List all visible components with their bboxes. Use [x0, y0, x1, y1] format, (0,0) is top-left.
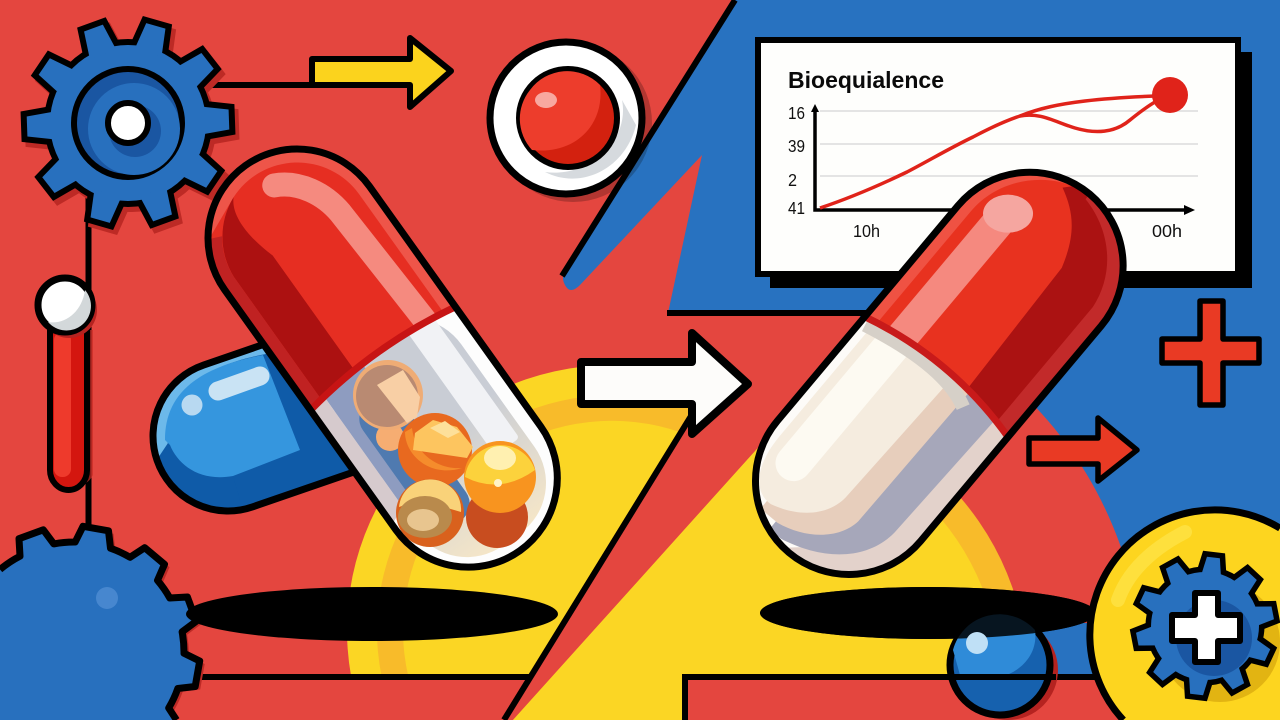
right capsule white body [759, 321, 1004, 571]
icon: blue ball [760, 587, 1096, 720]
left yellow sun [347, 368, 688, 674]
blue background wedge [563, 0, 1280, 677]
pellet: golden [464, 441, 536, 513]
blue capsule highlight bar [218, 376, 260, 391]
chart end marker [1152, 77, 1188, 113]
badge gear [1135, 556, 1275, 696]
icon: red arrow [1029, 418, 1137, 481]
icon: white arrow [581, 333, 748, 434]
right yellow sun [513, 448, 1014, 720]
chart y-axis labels: 41 [788, 198, 805, 218]
panel: bioequivalence chart [758, 40, 1252, 288]
connector lines from gear [88, 85, 320, 530]
badge plus [1172, 593, 1240, 662]
chart gridlines and axes [811, 104, 1198, 215]
chart y-axis labels [788, 103, 805, 218]
blue capsule highlight dot [182, 394, 202, 416]
red arc band [961, 408, 1121, 623]
left capsule clear shell [315, 311, 554, 564]
icon: bottom-left gear [0, 526, 205, 720]
chart y-axis labels: 39 [788, 136, 805, 156]
icon: yellow badge with gear and plus [1090, 510, 1280, 720]
right capsule: red cap and white body [752, 168, 1127, 578]
left ground shadow [186, 587, 558, 641]
icon: slider with white knob [38, 278, 97, 490]
left capsule: red cap and clear body with pellets [204, 146, 561, 571]
chart y-axis labels: 2 [788, 170, 797, 190]
right capsule red cap [870, 176, 1120, 431]
icon: red plus [1162, 301, 1259, 405]
pellet: orange [398, 413, 473, 487]
right capsule outline [717, 134, 1161, 613]
right ground shadow [760, 587, 1096, 639]
chart x-axis labels [853, 221, 1182, 241]
left capsule outline [173, 114, 592, 602]
icon: top-left gear [27, 22, 233, 229]
blue capsule behind [150, 342, 353, 514]
chart x-axis labels: 00h [1152, 221, 1182, 241]
chart title: Bioequialence [788, 67, 944, 93]
chart y-axis labels: 16 [788, 103, 805, 123]
icon: yellow arrow [312, 38, 451, 107]
pellet: dark orange [466, 486, 528, 548]
pellet: brown [396, 479, 464, 547]
chart curves [820, 96, 1155, 208]
blue patch under right shadow [1000, 623, 1100, 675]
icon: red ball in white ring [490, 42, 652, 202]
chart x-axis labels: 10h [853, 221, 880, 241]
left capsule red cap [212, 152, 450, 405]
blue capsule outline [133, 303, 432, 531]
pellet: peach [353, 360, 423, 451]
blue wedge outline lines [190, 0, 1110, 720]
